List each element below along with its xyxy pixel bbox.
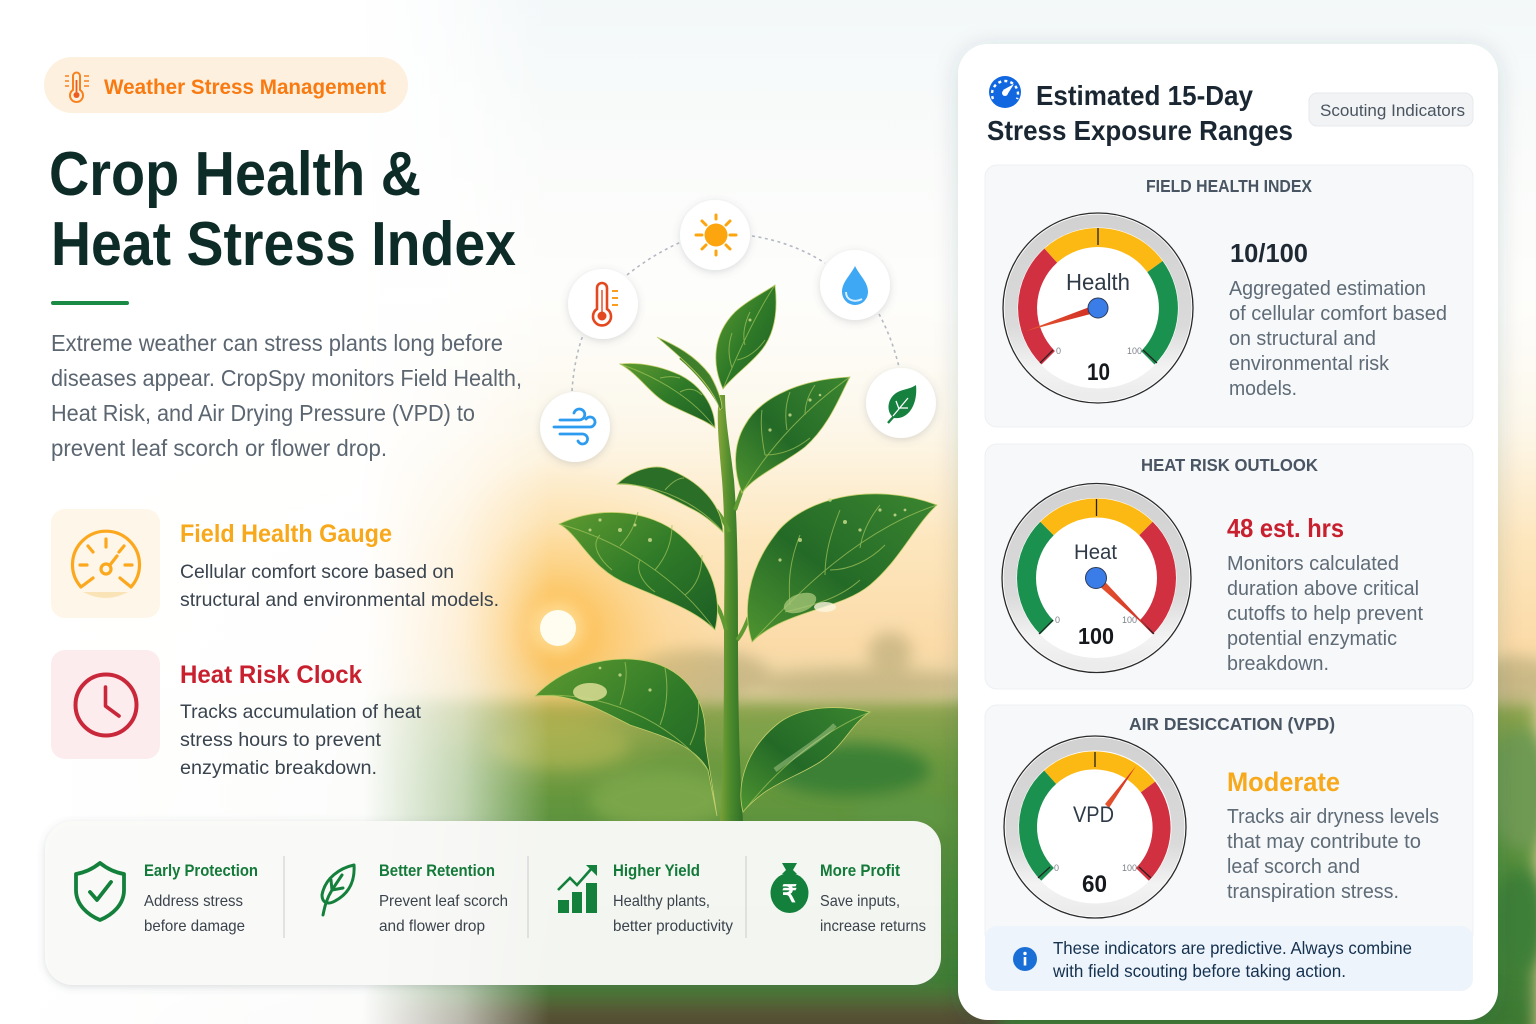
card: air desiccation: AIR DESICCATION (VPD) [1129,714,1335,734]
stat: 48 est. hrs: 48 est. hrs [1227,513,1344,543]
callout: predictive note: These indicators are predictive. Always combine [1053,938,1412,958]
feature: Heat Risk Clock: Tracks accumulation of heat [180,701,422,723]
icon: money bag [770,863,808,913]
gauge: vpd 60 [1004,736,1186,918]
feature: Field Health Gauge: structural and environmental models. [180,589,499,611]
gauge: health 10: 0 [1056,346,1061,356]
icon: shield [76,863,124,920]
stat: 10/100: on structural and [1229,328,1376,350]
gauge: vpd 60: 100 [1122,863,1137,873]
icon: wind [540,392,610,462]
callout: predictive note: with field scouting before taking action. [1052,961,1346,981]
benefit: More Profit: increase returns [820,918,926,935]
benefit: More Profit [770,862,926,935]
gauge: vpd 60: 0 [1054,863,1059,873]
intro paragraph: Extreme weather can stress plants long before [51,330,503,356]
intro paragraph [51,330,522,461]
panel heading [987,76,1293,146]
icon: water drop [820,250,890,320]
panel heading: Estimated 15-Day [1036,80,1253,111]
leaf: upper left [620,363,715,428]
gauge: health 10: Health [1066,269,1130,295]
stat: 48 est. hrs: Monitors calculated [1227,553,1399,575]
feature: Field Health Gauge [51,509,499,618]
icon: leaf outline [322,865,354,915]
leaf: thin upper left [657,337,722,410]
stat: Moderate: transpiration stress. [1227,881,1399,903]
gauge: heat 100: Heat [1074,541,1117,564]
gauge: heat 100: 100 [1122,615,1137,625]
stat: 48 est. hrs [1227,513,1423,675]
benefit: Better Retention: Better Retention [379,862,495,880]
intro paragraph: prevent leaf scorch or flower drop. [51,435,387,461]
gauge: health 10: 100 [1127,346,1142,356]
badge: Weather Stress Management: Weather Stress Management [104,76,386,99]
stat: Moderate [1227,767,1439,903]
stem and branches [680,358,752,822]
intro paragraph: Heat Risk, and Air Drying Pressure (VPD) to [51,400,475,426]
stat: 48 est. hrs: duration above critical [1227,578,1419,600]
icon: money bag: ₹ [782,881,797,908]
benefit: Better Retention: Prevent leaf scorch [379,893,508,910]
icon: gauge [51,509,160,618]
title: Crop Health & [49,140,421,209]
panel: stress exposure ranges [958,44,1498,1020]
icon: thermometer [568,269,638,339]
benefit: Higher Yield [558,862,733,935]
gauge: health 10: 10 [1087,359,1110,386]
stat: 48 est. hrs: potential enzymatic [1227,628,1397,650]
stat: 48 est. hrs: breakdown. [1227,653,1329,675]
stat: 10/100: Aggregated estimation [1229,278,1426,300]
stat: 10/100: environmental risk [1229,353,1390,375]
benefit: More Profit: More Profit [820,862,900,880]
feature: Field Health Gauge: Cellular comfort score based on [180,561,454,583]
gauge: heat 100: 0 [1055,615,1060,625]
icon: sun [680,200,750,270]
card: air desiccation [985,705,1473,945]
intro paragraph: diseases appear. CropSpy monitors Field Health, [51,365,522,391]
stat: Moderate: that may contribute to [1227,831,1421,853]
gauge: vpd 60: 60 [1082,871,1107,898]
benefit: Higher Yield: Higher Yield [613,862,700,880]
benefit: Better Retention [322,862,508,935]
icon: clock [51,650,160,759]
leaf: large right [747,494,937,642]
callout: predictive note [985,926,1473,991]
stat: 48 est. hrs: cutoffs to help prevent [1227,603,1423,625]
icon: info [1013,947,1037,971]
icon: rising chart [558,865,597,913]
icon: leaf [866,368,936,438]
benefit: Early Protection: before damage [144,918,245,935]
droplets [588,318,906,692]
icon: badge thermometer [65,72,89,102]
leaf: upper right [736,377,850,493]
leaf: large left [559,512,717,630]
plant [535,285,937,822]
panel heading: Stress Exposure Ranges [987,115,1293,146]
stat: Moderate: Moderate [1227,767,1340,797]
card: heat risk outlook: HEAT RISK OUTLOOK [1141,455,1318,475]
title [49,140,516,279]
gauge: vpd 60: VPD [1073,802,1114,827]
benefit: Better Retention: and flower drop [379,918,485,935]
benefit: Early Protection [76,862,258,935]
stat: 10/100: 10/100 [1230,238,1308,268]
stat: Moderate: Tracks air dryness levels [1227,806,1439,828]
chip: Scouting Indicators [1309,93,1473,126]
stat: Moderate: leaf scorch and [1227,856,1360,878]
card: heat risk outlook [985,444,1473,689]
feature: Heat Risk Clock [51,650,422,779]
gauge: heat 100: 100 [1078,623,1114,649]
feature: Field Health Gauge: Field Health Gauge [180,520,392,548]
benefit: Early Protection: Address stress [144,893,243,910]
stat: 10/100 [1229,238,1447,400]
card: field health index: FIELD HEALTH INDEX [1146,176,1312,196]
title: Heat Stress Index [51,210,516,279]
dashed arc connecting icons [572,236,899,391]
leaf: lower left [535,659,717,816]
stat: 10/100: of cellular comfort based [1229,303,1447,325]
benefit: Higher Yield: better productivity [613,918,733,935]
feature: Heat Risk Clock: Heat Risk Clock [180,661,362,689]
chip: Scouting Indicators: Scouting Indicators [1320,102,1465,120]
gauge: health 10 [1003,213,1193,403]
stat: 10/100: models. [1229,378,1297,400]
leaf: middle left [617,467,723,532]
feature: Heat Risk Clock: stress hours to prevent [180,729,382,751]
gauge: heat 100 [1002,484,1191,672]
card: field health index [985,165,1473,427]
badge: Weather Stress Management [44,57,408,113]
leaf: lower right [741,708,870,812]
icon: blue gauge [989,76,1021,108]
panel: benefits bar [45,821,941,985]
feature: Heat Risk Clock: enzymatic breakdown. [180,757,377,779]
benefit: Higher Yield: Healthy plants, [613,893,710,910]
benefit: Early Protection: Early Protection [144,862,258,880]
benefit: More Profit: Save inputs, [820,893,900,910]
leaf: top [716,285,776,389]
